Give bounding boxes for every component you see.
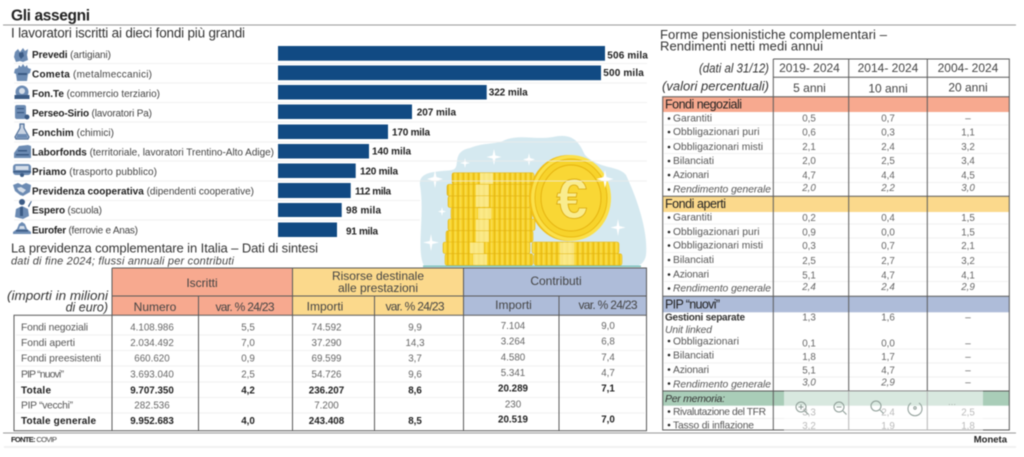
table header: Risorse destinale alle prestazioni: Importi [307, 300, 343, 314]
section: Fondi negoziali: 4,5 [961, 170, 975, 182]
section: Fondi negoziali: 0,5 [802, 114, 816, 124]
row: Fonchim: 170 mila [392, 128, 430, 138]
row: Fondi negoziali: 9,9 [408, 322, 422, 334]
section: Per memoria: Tasso di inflazione [673, 420, 754, 432]
section: PIP nuovi: PIP “nuovi” [665, 298, 720, 312]
table header: Iscritti: var. % 24/23 [216, 300, 275, 314]
section: Per memoria: Rivalutazione del TFR [673, 407, 766, 418]
row: PIP nuovi: 5.341 [501, 368, 525, 379]
table note: date and unit: (valori percentuali) [662, 80, 769, 94]
row: Totale [21, 384, 615, 396]
row: Fon.Te [14, 85, 528, 100]
section: PIP nuovi: 4,7 [881, 366, 895, 376]
row: Fon.Te: Fon.Te (commercio terziario) [32, 89, 160, 100]
section: Fondi negoziali: – [965, 114, 971, 124]
section: PIP nuovi: Gestioni separate [665, 312, 745, 324]
row: Totale: 236.207 [309, 385, 345, 396]
table header: Contributi: Contributi [530, 274, 582, 288]
row: PIP nuovi: 4,7 [601, 368, 615, 379]
overlay: translucent viewer toolbar [784, 391, 983, 433]
section: Fondi negoziali: Fondi negoziali [665, 98, 742, 112]
section: Fondi negoziali: 3,2 [961, 142, 975, 153]
row: Previdenza cooperativa: 112 mila [355, 186, 391, 198]
row: Cometa: Cometa (metalmeccanici) [32, 69, 152, 80]
row: Fondi preesistenti: 4.580 [501, 352, 526, 363]
panel: bar chart of the ten largest funds [13, 46, 648, 238]
row: Fondi negoziali [21, 321, 615, 334]
section: PIP nuovi: – [965, 338, 971, 350]
row: Fondi aperti: 37.290 [312, 338, 342, 349]
row: Fondi negoziali: 5,5 [241, 322, 255, 334]
row: Totale generale: 7,0 [601, 414, 615, 426]
panel: returns table [662, 59, 1009, 432]
heading: returns table [660, 27, 888, 54]
section: Per memoria [665, 393, 975, 432]
row: Fondi negoziali: 74.592 [312, 322, 341, 334]
table header: periods: 10 anni [868, 82, 908, 96]
section: Fondi aperti: 1,5 [961, 213, 975, 224]
row: Cometa [14, 64, 644, 81]
source note: FONTE: COVIP [11, 435, 57, 444]
row: Totale generale [21, 414, 615, 427]
row: Fondi preesistenti: Fondi preesistenti [21, 354, 101, 365]
section: Fondi negoziali: 4,7 [802, 170, 816, 182]
heading: bar chart: I lavoratori iscritti ai dieci fondi più grandi [11, 26, 245, 40]
section: Fondi aperti [665, 197, 975, 294]
section: Fondi negoziali: 0,6 [802, 128, 816, 138]
section: Per memoria: 3,2 [802, 421, 816, 432]
section: PIP nuovi: – [965, 352, 971, 363]
heading: returns table: Rendimenti netti medi annui [660, 38, 823, 54]
section: Fondi aperti: Garantiti [673, 212, 712, 224]
section: PIP nuovi: Obbligazionari [673, 336, 739, 348]
section: Fondi negoziali: Garantiti [673, 114, 712, 124]
row: Totale: 7,1 [601, 384, 615, 395]
section: Fondi aperti: Bilanciati [673, 255, 714, 266]
row: PIP nuovi: 3.693.040 [130, 369, 174, 380]
row: Cometa: 500 mila [603, 68, 644, 79]
illustration: euro coins: € [556, 167, 588, 230]
table header: periods [779, 61, 999, 96]
row: Fondi negoziali: 4.108.986 [130, 322, 174, 334]
row: Fondi aperti: 14,3 [405, 338, 425, 349]
section: Fondi aperti: Obbligazionari puri [673, 227, 760, 238]
row: Priamo [13, 164, 398, 178]
section: Fondi negoziali: Azionari [673, 170, 709, 181]
row: Fondi preesistenti: 0,9 [241, 354, 255, 365]
section: Fondi aperti: 2,4 [880, 282, 895, 293]
row: Totale generale: 4,0 [241, 416, 255, 427]
section: PIP nuovi: 1,3 [802, 312, 816, 324]
row: Fondi aperti: 3.264 [501, 336, 526, 348]
section: Fondi negoziali: 3,4 [961, 156, 975, 167]
row: Laborfonds: 140 mila [372, 146, 411, 158]
section: PIP nuovi: 1,8 [802, 352, 816, 363]
section: Fondi aperti: 2,4 [801, 282, 816, 293]
row: Fondi preesistenti [21, 352, 615, 365]
row: Totale: 4,2 [241, 385, 255, 396]
section: Fondi aperti: Azionari [673, 270, 709, 280]
table header: periods: 2014- 2024 [858, 61, 919, 75]
section: Per memoria: 3,3 [802, 408, 816, 418]
row: Totale: 8,6 [408, 385, 422, 396]
section: Fondi aperti: 0,0 [881, 228, 895, 238]
section: Per memoria: 1,9 [881, 421, 895, 432]
section: Fondi negoziali: Bilanciati [673, 156, 714, 167]
section: Fondi negoziali: 2,1 [802, 142, 816, 153]
section: PIP nuovi: 5,1 [802, 366, 816, 376]
table header: periods: 2004- 2024 [938, 61, 999, 75]
row: Fondi negoziali: 7.104 [501, 321, 526, 332]
row: Fondi aperti: 7,0 [241, 338, 255, 349]
table note: units: (importi in milioni [7, 289, 109, 303]
section: Fondi aperti: Fondi aperti [665, 197, 726, 211]
section: PIP nuovi: – [965, 312, 971, 324]
section: Fondi aperti: 0,2 [802, 213, 816, 224]
section: Fondi aperti: 4,1 [961, 270, 975, 282]
row: Espero: Espero (scuola) [32, 206, 102, 216]
section: Fondi aperti: 2,1 [961, 241, 975, 252]
section: PIP nuovi: – [965, 366, 971, 376]
section: PIP nuovi: Rendimento generale [673, 380, 771, 390]
row: Fondi preesistenti: 3,7 [408, 354, 422, 365]
panel: summary table [7, 268, 646, 431]
table note: date and unit [662, 62, 769, 94]
section: Fondi negoziali: 0,7 [881, 114, 895, 124]
row: Totale: 20.289 [498, 384, 529, 395]
row: Eurofer: 91 mila [346, 226, 378, 238]
section: Fondi negoziali: 1,1 [961, 128, 975, 138]
row: Perseo-Sirio [15, 104, 456, 120]
row: PIP nuovi: 2,5 [241, 369, 255, 380]
section: Fondi negoziali: 2,2 [880, 183, 895, 194]
heading: returns table: Forme pensionistiche complementari – [660, 27, 888, 42]
section: Fondi aperti: 1,5 [961, 228, 975, 238]
section: Fondi negoziali: 2,4 [881, 142, 895, 153]
table header: Iscritti: Numero [134, 300, 177, 314]
section: PIP nuovi: 0,0 [881, 338, 895, 350]
row: PIP vecchi: 282.536 [134, 400, 170, 412]
row: Previdenza cooperativa [13, 183, 391, 198]
table header: periods: 5 anni [793, 81, 826, 95]
section: PIP nuovi: Bilanciati [673, 350, 714, 362]
section: Per memoria: 2,4 [881, 408, 895, 418]
section: PIP nuovi: – [965, 378, 971, 388]
heading: summary table: La previdenza complementare in Italia – Dati di sintesi [11, 240, 318, 256]
section: Fondi negoziali: Rendimento generale [673, 184, 771, 196]
section: Fondi aperti: 4,7 [881, 270, 895, 282]
section: PIP nuovi: 2,9 [880, 378, 895, 388]
table header: Contributi: var. % 24/23 [578, 298, 638, 312]
overlay: translucent viewer toolbar: ··· [948, 400, 956, 409]
title: Gli assegni [11, 8, 90, 24]
section: Per memoria: Per memoria: [665, 393, 725, 405]
row: PIP vecchi: PIP “vecchi” [21, 400, 74, 412]
table header: Contributi: Importi [495, 298, 532, 312]
section: Fondi aperti: 0,4 [881, 213, 895, 224]
section: Fondi aperti: 0,9 [802, 228, 816, 238]
row: Fondi aperti: Fondi aperti [21, 338, 75, 349]
table header: Risorse destinale alle prestazioni: alle prestazioni [338, 281, 418, 295]
section: Fondi negoziali: Obbligazionari puri [673, 127, 760, 138]
section: Fondi aperti: Obbligazionari misti [673, 240, 763, 252]
row: Laborfonds [14, 144, 411, 158]
section: Fondi negoziali: 3,0 [961, 183, 975, 194]
row: Totale: Totale [21, 385, 51, 396]
row: Fondi preesistenti: 660.620 [134, 354, 170, 365]
section: Fondi aperti: 5,1 [802, 270, 816, 282]
row: Totale generale: Totale generale [21, 416, 96, 427]
row: Espero [15, 199, 381, 219]
table header: Iscritti [134, 276, 275, 314]
table header: Contributi [495, 274, 638, 312]
section: PIP nuovi [665, 298, 971, 390]
section: Fondi negoziali: 2,0 [801, 183, 816, 194]
row: Fondi aperti: 6,8 [601, 336, 615, 348]
row: Totale generale: 9.952.683 [130, 416, 174, 427]
row: PIP nuovi: 54.726 [312, 369, 342, 380]
section: Fondi negoziali: Obbligazionari misti [673, 142, 763, 153]
section: Fondi negoziali: 4,4 [881, 170, 895, 182]
section: Fondi aperti: 2,5 [802, 256, 816, 267]
table header: Risorse destinale alle prestazioni [307, 269, 445, 314]
section: PIP nuovi: 0,1 [802, 338, 816, 350]
row: PIP nuovi: 9,6 [408, 369, 422, 380]
publisher credit: Moneta [974, 434, 1008, 446]
section: Fondi aperti: 0,3 [802, 241, 816, 252]
section: PIP nuovi: 1,6 [881, 312, 895, 324]
row: Fonchim [15, 124, 430, 139]
row: Fondi aperti [21, 336, 615, 349]
row: Prevedi: 506 mila [607, 50, 648, 61]
row: Prevedi [14, 46, 648, 62]
section: Fondi aperti: 0,7 [881, 241, 895, 252]
section: Fondi aperti: 2,7 [881, 256, 895, 267]
section: Fondi negoziali: 2,5 [881, 156, 895, 167]
row: Perseo-Sirio: Perseo-Sirio (lavoratori Pa) [32, 108, 152, 120]
section: Fondi negoziali [665, 98, 975, 196]
section: PIP nuovi: 3,0 [802, 378, 816, 388]
row: Prevedi: Prevedi (artigiani) [32, 50, 111, 61]
row: Fondi preesistenti: 69.599 [312, 354, 341, 365]
row: PIP nuovi [21, 368, 615, 380]
row: Laborfonds: Laborfonds (territoriale, lavoratori Trentino-Alto Adige) [32, 148, 274, 158]
section: Fondi aperti: 3,2 [961, 256, 975, 267]
row: Fondi aperti: 2.034.492 [130, 338, 174, 349]
row: PIP nuovi: PIP “nuovi” [21, 369, 65, 380]
row: Totale: 9.707.350 [130, 385, 174, 396]
row: Espero: 98 mila [346, 206, 381, 216]
table header: Risorse destinale alle prestazioni: var. % 24/23 [386, 300, 445, 314]
row: Totale generale: 20.519 [498, 414, 529, 426]
section: Fondi aperti: 2,9 [960, 282, 975, 293]
row: Priamo: 120 mila [360, 166, 398, 178]
section: Fondi negoziali: 0,3 [881, 128, 895, 138]
row: Fon.Te: 322 mila [489, 88, 528, 98]
row: Fondi negoziali: 9,0 [601, 321, 615, 332]
row: PIP vecchi: 7.200 [314, 400, 339, 412]
illustration: euro coins [420, 136, 646, 267]
table header: Iscritti: Iscritti [186, 276, 218, 290]
row: Totale generale: 8,5 [408, 416, 422, 427]
section: PIP nuovi: Azionari [673, 365, 709, 376]
section: PIP nuovi: Unit linked [665, 325, 712, 336]
row: Previdenza cooperativa: Previdenza cooperativa (dipendenti cooperative) [32, 186, 254, 198]
section: Per memoria: 2,5 [961, 408, 975, 418]
row: Priamo: Priamo (trasporto pubblico) [32, 167, 157, 178]
row: Fondi preesistenti: 7,4 [601, 352, 615, 363]
table note: date and unit: (dati al 31/12) [699, 62, 769, 76]
section: PIP nuovi: 1,7 [881, 352, 895, 363]
row: Perseo-Sirio: 207 mila [417, 108, 456, 118]
table header: Risorse destinale alle prestazioni: Risorse destinale [332, 269, 424, 283]
row: PIP vecchi: 230 [505, 399, 522, 410]
row: Totale generale: 243.408 [309, 416, 345, 427]
row: Fonchim: Fonchim (chimici) [32, 128, 114, 139]
row: Eurofer [13, 222, 378, 238]
row: PIP vecchi [21, 399, 522, 412]
table note: units [7, 289, 109, 314]
table note: units: di euro) [66, 300, 108, 314]
table header: periods: 2019- 2024 [779, 61, 840, 75]
row: Eurofer: Eurofer (ferrovie e Anas) [32, 226, 138, 236]
row: Fondi negoziali: Fondi negoziali [21, 322, 88, 334]
section: Per memoria: 1,8 [961, 421, 975, 432]
section: Fondi negoziali: 2,0 [802, 156, 816, 167]
section: Fondi aperti: Rendimento generale [673, 284, 771, 294]
subheading: summary table: dati di fine 2024; flussi annuali per contributi [11, 256, 235, 268]
table header: periods: 20 anni [948, 80, 988, 94]
